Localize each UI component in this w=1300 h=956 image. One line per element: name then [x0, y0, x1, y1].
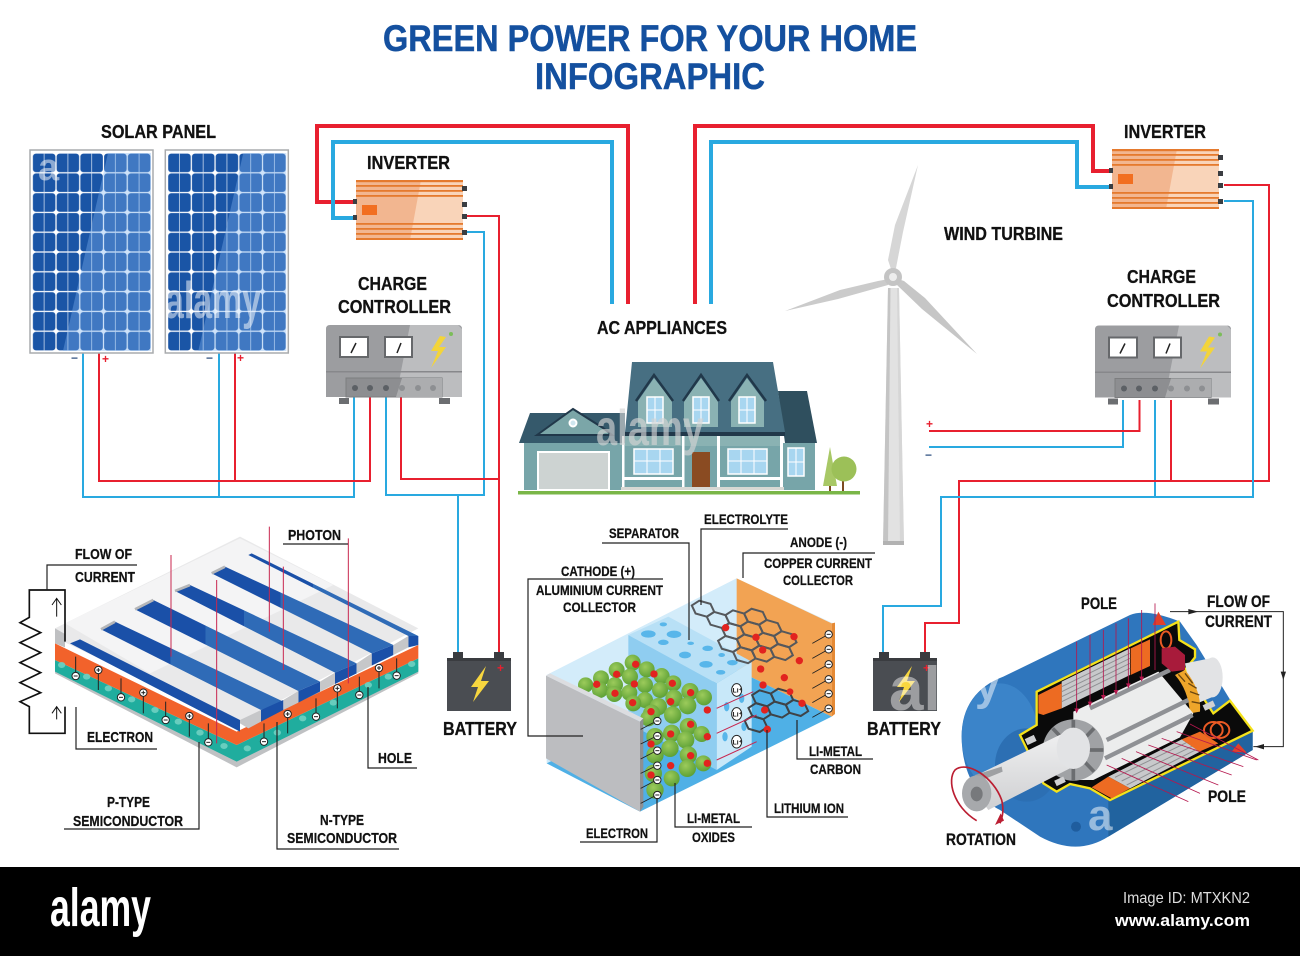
- watermark on solar panels: [38, 147, 261, 330]
- lower stator coil: [1108, 739, 1200, 788]
- porch: [622, 436, 783, 487]
- lithium ion cell labels: ELECTRON: [586, 825, 648, 841]
- lithium ion cell labels: LITHIUM ION: [774, 800, 844, 816]
- solar cell labels: N-TYPE: [320, 812, 364, 829]
- heading: charge controller right: CHARGE: [1127, 267, 1196, 287]
- rear shaft: [1185, 657, 1223, 705]
- main roof: [625, 362, 785, 432]
- title: [383, 18, 917, 97]
- solar cell labels: HOLE: [378, 750, 412, 767]
- lithium ion cell labels: COLLECTOR: [783, 572, 853, 588]
- icon: charge controller left: [326, 325, 462, 404]
- li+ badges: Li⁺: [733, 739, 743, 746]
- cathode plate: [546, 676, 640, 812]
- front left strip: [70, 639, 240, 732]
- solar cell labels: PHOTON: [288, 527, 341, 544]
- lithium ion cell labels: ALUMINIUM CURRENT: [536, 582, 663, 598]
- lithium ion cell labels: SEPARATOR: [609, 525, 679, 541]
- current circuit: [20, 590, 65, 733]
- li+ badges: Li⁺: [733, 688, 743, 695]
- left AC wires: [317, 126, 628, 304]
- polarity marks for wind turbine: −: [925, 448, 932, 462]
- polarity marks for wind turbine: [925, 417, 933, 462]
- panel: solar panel 2: [165, 150, 288, 353]
- separator: [628, 617, 752, 683]
- footer bar: [0, 867, 1300, 956]
- garage gable: [537, 409, 612, 435]
- lithium ions in carbon: [722, 624, 806, 733]
- heading: charge controller right: [1107, 267, 1220, 311]
- li+ badges: Li⁺: [733, 712, 743, 719]
- polarity marks: −: [206, 351, 213, 365]
- screw: [1071, 822, 1081, 832]
- solar cell labels: FLOW OF: [75, 546, 132, 563]
- motor labels: [946, 592, 1272, 849]
- lower shell shade: [1108, 732, 1253, 837]
- footer logo: alamy: [50, 878, 151, 938]
- green oxide balls: [578, 655, 712, 799]
- motor labels: ROTATION: [946, 830, 1016, 849]
- watermark on solar panels: alamy: [165, 272, 261, 330]
- separator pores: [641, 622, 747, 741]
- icon: house: [518, 362, 860, 494]
- diagram: solar cell: [20, 527, 418, 767]
- blades: [888, 165, 918, 272]
- rotation arrow: [952, 767, 1003, 823]
- heading: ac appliances: AC APPLIANCES: [597, 318, 727, 338]
- arrows and charges: [76, 657, 397, 742]
- teal dots: [58, 661, 415, 751]
- watermark on house: alamy: [596, 400, 704, 456]
- front faces: [261, 636, 418, 722]
- polarity marks: −: [71, 351, 78, 365]
- icon: inverter right: [1109, 149, 1223, 209]
- solar cell labels: SEMICONDUCTOR: [73, 813, 183, 830]
- motor body: [962, 613, 1253, 847]
- heading: inverter right: INVERTER: [1124, 122, 1206, 142]
- field lines: [1077, 603, 1258, 802]
- lithium ion cell labels: [528, 511, 875, 845]
- motor labels: POLE: [1081, 594, 1117, 613]
- stripe shadows: [101, 567, 225, 629]
- watermark on motor: [975, 661, 1113, 840]
- heading: charge controller left: CHARGE: [358, 274, 427, 294]
- garage roof: [519, 413, 625, 443]
- right wiring: [883, 185, 1269, 654]
- hub: [884, 268, 902, 286]
- heading: battery left: BATTERY: [443, 719, 517, 739]
- top stator coil: [1062, 648, 1130, 708]
- lithium ion cell labels: COPPER CURRENT: [764, 555, 872, 571]
- photon lines: [171, 527, 348, 743]
- base layer: [55, 667, 418, 767]
- rotor end disc: [1043, 719, 1104, 781]
- polarity marks for wind turbine: +: [926, 417, 933, 431]
- cathode electrons: [641, 721, 657, 803]
- top surface: [547, 578, 833, 720]
- end face: [962, 683, 1038, 790]
- icon: inverter left: [353, 180, 467, 240]
- icon: charge controller right: [1095, 326, 1231, 404]
- solar panel wiring: [83, 216, 499, 654]
- watermark on motor: y: [975, 661, 1000, 710]
- floor: [547, 670, 832, 812]
- polarity marks: [71, 351, 244, 366]
- footer image id: Image ID: MTXKN2: [1123, 890, 1250, 907]
- diagram: lithium ion cell: [546, 578, 835, 812]
- motor labels: POLE: [1208, 787, 1246, 806]
- li+ badges: [732, 684, 743, 748]
- solar cell labels: CURRENT: [75, 569, 135, 586]
- icon: wind turbine: [785, 165, 977, 545]
- current flow wire: [1170, 612, 1283, 747]
- solar cell labels: P-TYPE: [107, 794, 150, 811]
- trees: [829, 484, 831, 491]
- shaft: [967, 728, 1090, 810]
- ions on oxide: [593, 661, 711, 779]
- heading: wind turbine: WIND TURBINE: [944, 224, 1063, 244]
- arrow heads: [1074, 677, 1144, 713]
- lithium ion cell labels: COLLECTOR: [563, 599, 636, 615]
- dormers: [636, 375, 766, 427]
- lithium ion cell labels: CATHODE (+): [561, 563, 635, 579]
- watermark on right battery: ala: [889, 655, 976, 724]
- right wing roof: [778, 391, 817, 443]
- motor labels: CURRENT: [1205, 612, 1272, 631]
- icon: battery right: [873, 652, 937, 711]
- polarity marks: +: [102, 352, 109, 366]
- watermark on motor: a: [1088, 791, 1113, 840]
- watermark on solar panels: a: [38, 147, 60, 189]
- title: INFOGRAPHIC: [535, 56, 765, 97]
- top surface: [55, 537, 418, 723]
- anode electrons: [812, 634, 828, 717]
- lithium ion cell labels: LI-METAL: [687, 810, 740, 826]
- orange coil blocks: [1038, 683, 1062, 715]
- heading: solar panel: SOLAR PANEL: [101, 122, 216, 142]
- polarity marks: +: [237, 351, 244, 365]
- lithium ion cell labels: CARBON: [810, 761, 861, 777]
- lithium ion cell labels: LI-METAL: [809, 743, 862, 759]
- blue stripes: [101, 553, 418, 710]
- motor labels: FLOW OF: [1207, 592, 1270, 611]
- current arrows: [52, 598, 61, 719]
- solar cell labels: SEMICONDUCTOR: [287, 830, 397, 847]
- door: [692, 452, 710, 487]
- li+ links: [717, 692, 757, 760]
- title: GREEN POWER FOR YOUR HOME: [383, 18, 917, 59]
- graphene upper layer: [681, 593, 802, 674]
- teal layer: [55, 658, 418, 762]
- garage door: [538, 452, 609, 490]
- graphene lower layer: [743, 682, 812, 743]
- commutator: [1175, 670, 1200, 713]
- right AC wires: [695, 126, 1110, 304]
- panel: solar panel 1: [30, 150, 153, 353]
- anode plate: [737, 578, 832, 717]
- tower: [883, 288, 904, 545]
- lithium ion cell labels: ANODE (-): [790, 534, 847, 550]
- heading: charge controller left: [338, 274, 451, 317]
- lower windows: [634, 448, 804, 476]
- lithium ion cell labels: OXIDES: [692, 829, 735, 845]
- heading: charge controller right: CONTROLLER: [1107, 291, 1220, 311]
- rotor: [1073, 672, 1193, 780]
- orange layer: [55, 643, 418, 745]
- icon: battery left: [447, 652, 511, 711]
- solar panels: [30, 150, 288, 366]
- solar cell labels: [47, 527, 417, 849]
- diagram: electric motor: [952, 603, 1286, 847]
- terminals: [1153, 612, 1166, 625]
- walls: [524, 443, 815, 490]
- ground: [518, 491, 860, 494]
- grey corner: [55, 628, 65, 647]
- bearings: [1025, 701, 1215, 786]
- heading: battery right: BATTERY: [867, 719, 941, 739]
- eave: [625, 432, 785, 436]
- lithium ion cell labels: ELECTROLYTE: [704, 511, 788, 527]
- coil loops: [1161, 631, 1229, 738]
- solar cell labels: ELECTRON: [87, 729, 153, 746]
- heading: charge controller left: CONTROLLER: [338, 297, 451, 317]
- footer url: www.alamy.com: [1114, 911, 1250, 930]
- cutaway interior: [1020, 622, 1253, 800]
- red brush: [1162, 647, 1185, 672]
- back wall: [547, 578, 737, 763]
- heading: inverter left: INVERTER: [367, 153, 450, 173]
